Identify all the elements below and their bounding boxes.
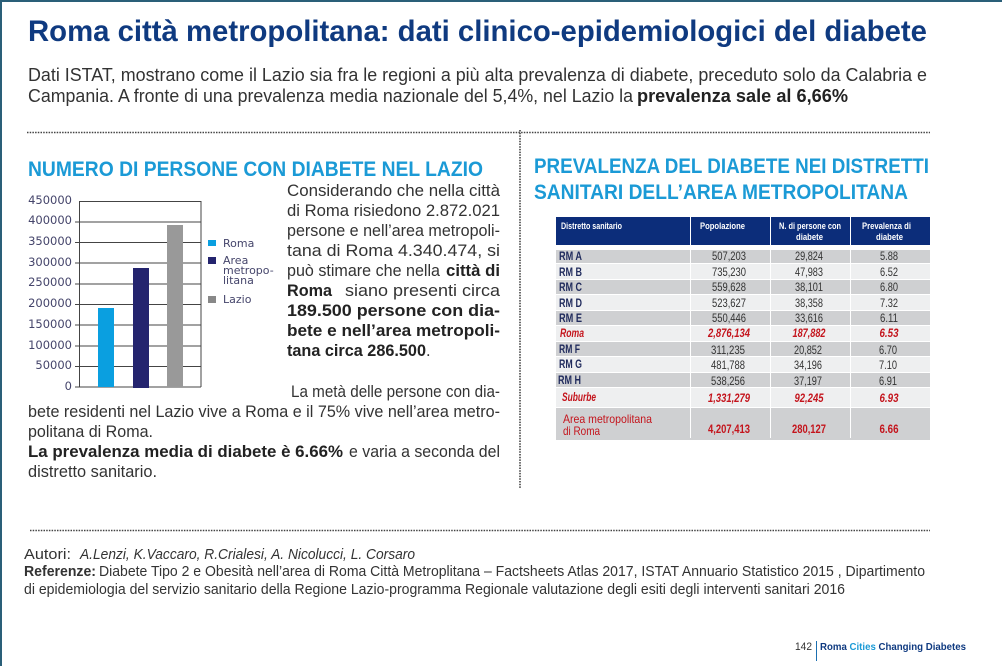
left column body text: può stimare che nella [287,262,441,280]
row: RM D: 7.32 [880,298,898,310]
table row backgrounds [556,250,930,440]
table header: N. di persone con [779,221,841,231]
row: RM F: 311,235 [711,345,745,357]
table header: diabete [876,232,903,242]
row: Area metropolitana di Roma: di Roma [563,424,600,438]
left column body text: città di [446,262,500,280]
y axis labels: 350000 [28,234,72,248]
row: RM A: 507,203 [712,251,746,263]
row: RM G: 481,788 [711,360,745,372]
left column body text: bete residenti nel Lazio vive a Roma e il 75% vive nell’area metro- [28,403,500,421]
row: RM D: RM D [559,296,582,310]
y axis labels: 200000 [28,296,72,310]
title: Roma città metropolitana: dati clinico-epidemiologici del diabete [28,15,927,48]
left column body text: Roma [287,282,333,300]
row: RM H: RM H [558,373,581,387]
y axis labels [28,193,72,393]
row: Suburbe: 6.93 [880,393,899,405]
left column body text: tana di Roma 4.340.474, si [287,242,500,260]
row: RM G [559,357,897,372]
row: Suburbe: 1,331,279 [708,393,750,405]
intro text: prevalenza sale al 6,66% [637,86,848,106]
row: RM B: 47,983 [795,267,823,279]
row: Suburbe: 92,245 [794,393,824,405]
references [24,563,925,598]
row: RM D: 523,627 [712,298,746,310]
row: Suburbe: Suburbe [562,390,596,404]
row: RM A: RM A [559,249,582,263]
row: RM C: RM C [559,280,582,294]
row: RM B: 735,230 [712,267,746,279]
legend: Area [223,254,248,267]
row: RM H: 6.91 [879,376,897,388]
row: RM B: RM B [559,265,582,279]
legend: metropo- [223,264,274,277]
legend [208,237,274,306]
row: RM F [559,342,897,357]
row: Area metropolitana di Roma: Area metropolitana [563,412,652,426]
page footer [795,641,966,661]
table: prevalenza per distretto sanitario [556,217,930,440]
row: RM G: 7.10 [879,360,897,372]
row: RM H: 538,256 [711,376,745,388]
row: Area metropolitana di Roma [563,412,898,438]
intro text [28,65,927,106]
bar: Roma [98,308,114,387]
legend: Lazio [223,293,252,306]
left column body text: Considerando che nella città [287,182,501,200]
page footer: Roma Cities Changing Diabetes [820,641,966,653]
row: RM H: 37,197 [794,376,822,388]
authors: A.Lenzi, K.Vaccaro, R.Crialesi, A. Nicolucci, L. Corsaro [79,546,415,563]
bar: Area metropolitana [133,268,149,388]
row: RM B [559,265,898,279]
row: RM A: 29,824 [795,251,823,263]
row: RM G: RM G [559,357,582,371]
heading: prevalenza del diabete nei distretti [534,155,929,204]
y axis labels: 400000 [28,213,72,227]
row: Roma: 187,882 [792,328,826,340]
left column body text: persone e nell’area metropoli- [287,222,500,240]
row: RM F: RM F [559,342,580,356]
table header: Distretto sanitario [561,221,622,231]
left column body text: 189.500 persone con dia- [287,302,500,320]
left column body text: La metà delle persone con dia- [291,383,500,401]
table header [556,217,930,245]
row: RM D [559,296,898,310]
y axis labels: 0 [65,379,72,393]
intro text: Dati ISTAT, mostrano come il Lazio sia fra le regioni a più alta prevalenza di diabete, preceduto solo da Calabria e [28,65,927,85]
bar chart: persone con diabete [28,193,274,393]
references: Referenze: [24,563,96,580]
left column body text: distretto sanitario. [28,463,157,481]
table header: Prevalenza di [862,221,911,231]
row: Suburbe [562,390,899,405]
row: RM F: 20,852 [794,345,822,357]
row: RM C: 6.80 [880,282,898,294]
y axis labels: 150000 [28,317,72,331]
left column body text: di Roma risiedono 2.872.021 [287,202,500,220]
left column body text [28,182,501,481]
row: Area metropolitana di Roma: 6.66 [880,424,898,436]
row: Roma: 2,876,134 [707,328,750,340]
heading: numero di persone con diabete nel Lazio: NUMERO DI PERSONE CON DIABETE NEL LAZIO [28,158,483,181]
row: RM D: 38,358 [795,298,823,310]
row: Roma: Roma [560,326,584,340]
row: RM E: RM E [559,311,582,325]
row: RM G: 34,196 [794,360,822,372]
row: RM C [559,280,898,294]
table header: diabete [796,232,823,242]
row: RM C: 38,101 [795,282,823,294]
row: RM E [559,311,898,325]
y axis labels: 450000 [28,193,72,207]
left column body text: e varia a seconda del [349,443,500,461]
row: RM E: 33,616 [795,313,823,325]
row: RM E: 6.11 [880,313,898,325]
heading: prevalenza del diabete nei distretti: SANITARI DELL’AREA METROPOLITANA [534,181,908,204]
row: Roma: 6.53 [880,328,899,340]
table header: Popolazione [700,221,745,231]
row: Area metropolitana di Roma: 4,207,413 [708,424,750,436]
row: RM H [558,373,897,388]
row: RM E: 550,446 [712,313,746,325]
row: RM C: 559,628 [712,282,746,294]
y axis labels: 50000 [35,358,72,372]
bar: Lazio [167,225,183,387]
page footer: 142 [795,641,812,653]
row: Roma [560,326,899,340]
legend: Roma [223,237,254,250]
authors: Autori: [24,546,71,563]
row: RM B: 6.52 [880,267,898,279]
y axis labels: 300000 [28,255,72,269]
left column body text: siano presenti circa [345,282,501,300]
left column body text: bete e nell’area metropoli- [287,322,500,340]
row: RM A [559,249,898,263]
left column body text: politana di Roma. [28,423,153,441]
intro text: Campania. A fronte di una prevalenza media nazionale del 5,4%, nel Lazio la [28,86,634,106]
y axis labels: 100000 [28,338,72,352]
row: RM A: 5.88 [880,251,898,263]
left column body text: tana circa 286.500 [287,342,426,360]
references: Diabete Tipo 2 e Obesità nell’area di Roma Città Metroplitana – Factsheets Atlas 2017, ISTAT Annuario Statistico 2015 , Dipartimento [99,563,925,580]
heading: prevalenza del diabete nei distretti: PREVALENZA DEL DIABETE NEI DISTRETTI [534,155,929,178]
references: di epidemiologia del servizio sanitario della Regione Lazio-programma Regionale valutazione degli esiti degli interventi sanitari 2016 [24,581,845,598]
left column body text: . [426,342,431,360]
left column body text: La prevalenza media di diabete è 6.66% [28,443,343,461]
legend: litana [223,274,254,287]
y axis labels: 250000 [28,275,72,289]
row: RM F: 6.70 [879,345,897,357]
row: Area metropolitana di Roma: 280,127 [792,424,826,436]
